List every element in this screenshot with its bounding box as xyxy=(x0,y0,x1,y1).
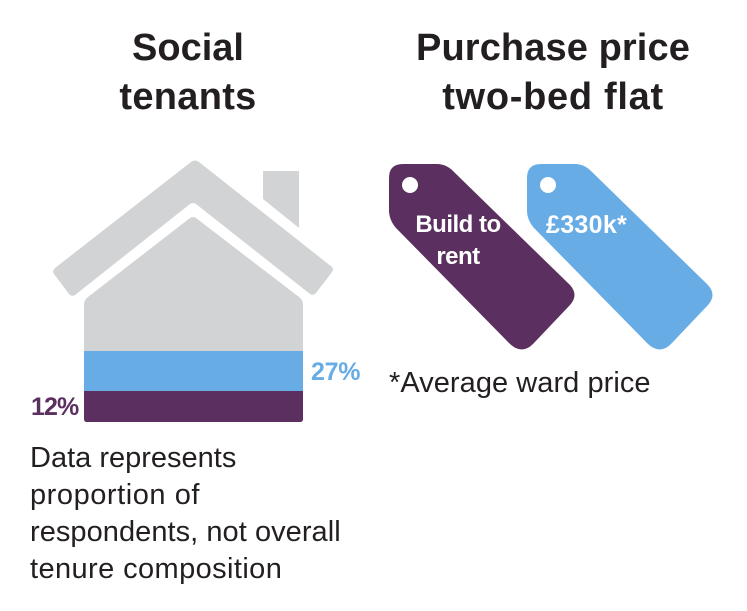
heading: purchase price two-bed flat: two-bed flat xyxy=(442,76,664,118)
purple band 12% xyxy=(84,391,303,422)
heading: social tenants xyxy=(119,27,257,118)
house chimney xyxy=(263,171,299,228)
house roof xyxy=(53,160,333,296)
text: data note: respondents, not overall xyxy=(30,516,341,548)
heading: social tenants: Social xyxy=(132,27,244,69)
heading: social tenants: tenants xyxy=(119,76,257,118)
text: average ward price note: *Average ward price xyxy=(389,367,651,399)
tag: build to rent: rent xyxy=(436,243,480,270)
tag: £330k xyxy=(527,164,712,350)
icon: house xyxy=(53,160,333,422)
text: data note: tenure composition xyxy=(30,553,282,585)
heading: purchase price two-bed flat: Purchase price xyxy=(416,27,690,69)
tag: build to rent: Build to xyxy=(415,211,501,238)
text: data note xyxy=(30,442,341,585)
tag: £330k: £330k* xyxy=(546,211,627,239)
label: 12%: 12% xyxy=(31,393,78,421)
tag: build to rent xyxy=(389,164,574,350)
heading: purchase price two-bed flat xyxy=(416,27,690,118)
text: data note: Data represents xyxy=(30,442,236,474)
text: data note: proportion of xyxy=(30,479,200,511)
label: 27%: 27% xyxy=(311,358,360,386)
blue band 27% xyxy=(84,351,303,391)
house body xyxy=(84,217,303,351)
